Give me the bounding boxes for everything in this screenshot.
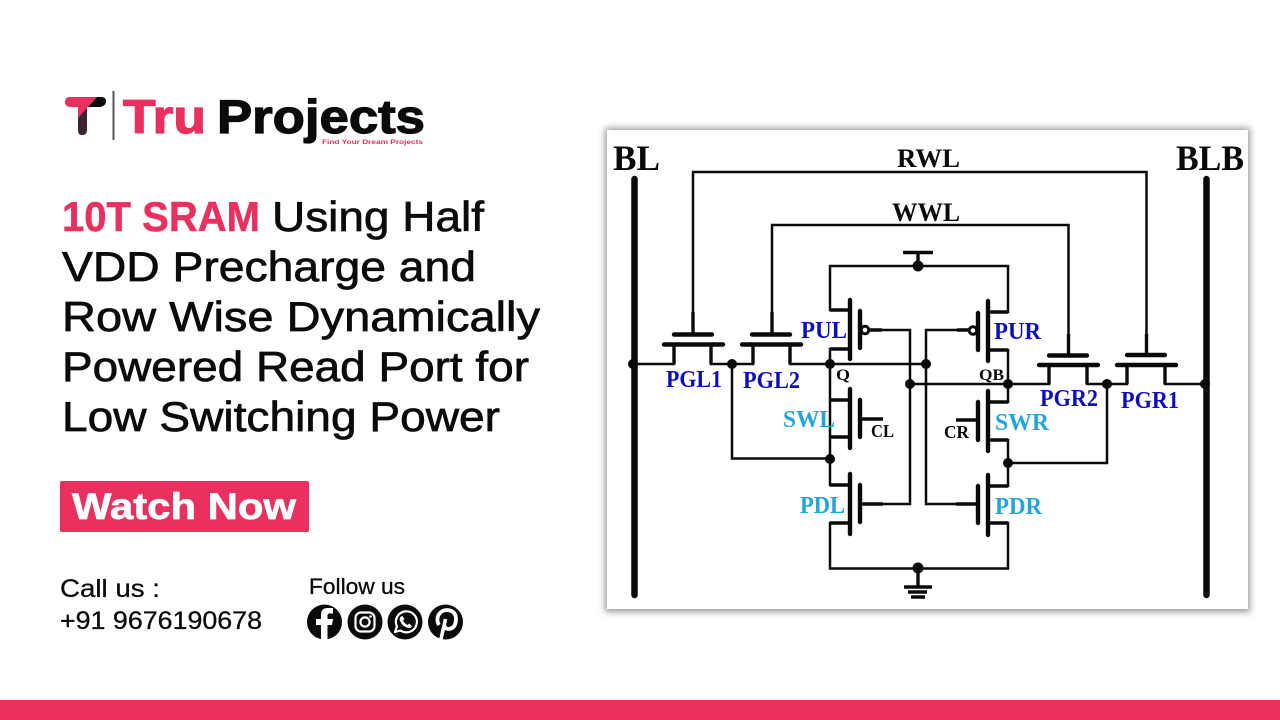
transistor PDR	[956, 475, 1043, 535]
transistor PDR: PDR	[995, 494, 1043, 520]
button: Watch Now: Watch Now	[72, 486, 296, 527]
title: 10T SRAM	[62, 193, 260, 240]
transistor SWR: SWR	[995, 410, 1050, 436]
transistor PGR2	[1039, 334, 1098, 412]
button: Watch Now	[60, 481, 309, 532]
bit line BLB: BLB	[1176, 138, 1244, 178]
title: Using Half	[272, 193, 484, 240]
bit line BL: BL	[613, 138, 660, 178]
write word line WWL: WWL	[892, 198, 960, 227]
transistor PGL2	[742, 312, 801, 394]
logo word: Projects: Projects	[217, 90, 425, 143]
follow us label: Follow us	[309, 574, 405, 599]
ground symbol	[904, 562, 932, 597]
transistor PUL	[801, 300, 882, 359]
transistor PUR: PUR	[994, 319, 1042, 345]
transistor PUR	[957, 301, 1042, 361]
transistor SWL: CL	[871, 421, 894, 441]
transistor PGR1	[1117, 334, 1179, 414]
logo divider	[112, 91, 114, 140]
contact: call us: Call us :	[60, 575, 160, 603]
transistor PDL: PDL	[800, 493, 845, 519]
transistor PUL: PUL	[801, 318, 847, 344]
transistor PDL	[800, 474, 883, 534]
transistor PGL2: PGL2	[743, 368, 800, 394]
icon: T logo mark	[65, 97, 106, 135]
wires	[634, 266, 1206, 568]
title	[62, 193, 540, 440]
title: Powered Read Port for	[62, 343, 529, 390]
icon: instagram	[348, 604, 382, 640]
transistor SWR: CR	[944, 422, 970, 442]
transistor PGL1: PGL1	[666, 367, 722, 393]
transistor SWL: SWL	[783, 407, 835, 433]
transistor PGR2: PGR2	[1040, 386, 1098, 412]
node labels Q and QB: QB	[979, 367, 1004, 384]
icon: pinterest	[428, 604, 463, 640]
panel: 10T SRAM circuit schematic	[605, 128, 1250, 612]
social icons	[307, 604, 463, 640]
transistor SWR	[944, 391, 1050, 451]
transistor PGL1	[664, 312, 723, 393]
contact: call us	[60, 575, 262, 635]
VDD supply symbol	[903, 252, 933, 272]
bottom bar	[0, 700, 1280, 720]
title: Low Switching Power	[62, 393, 500, 440]
node labels Q and QB: Q	[836, 367, 850, 384]
logo: TruProjects	[65, 90, 425, 146]
read word line RWL	[693, 144, 1146, 335]
icon: whatsapp	[388, 604, 422, 640]
node labels Q and QB	[836, 367, 1004, 384]
title: VDD Precharge and	[62, 243, 476, 290]
read word line RWL: RWL	[897, 144, 960, 173]
contact: call us: +91 9676190678	[60, 607, 262, 635]
transistor PGR1: PGR1	[1121, 388, 1179, 414]
junction dots	[628, 359, 1210, 468]
transistor SWL	[783, 389, 894, 448]
write word line WWL	[772, 198, 1068, 355]
title: Row Wise Dynamically	[62, 293, 540, 340]
logo word: Tru: Tru	[123, 90, 206, 143]
logo tagline: Find Your Dream Projects	[322, 139, 423, 146]
icon: facebook	[307, 604, 342, 640]
